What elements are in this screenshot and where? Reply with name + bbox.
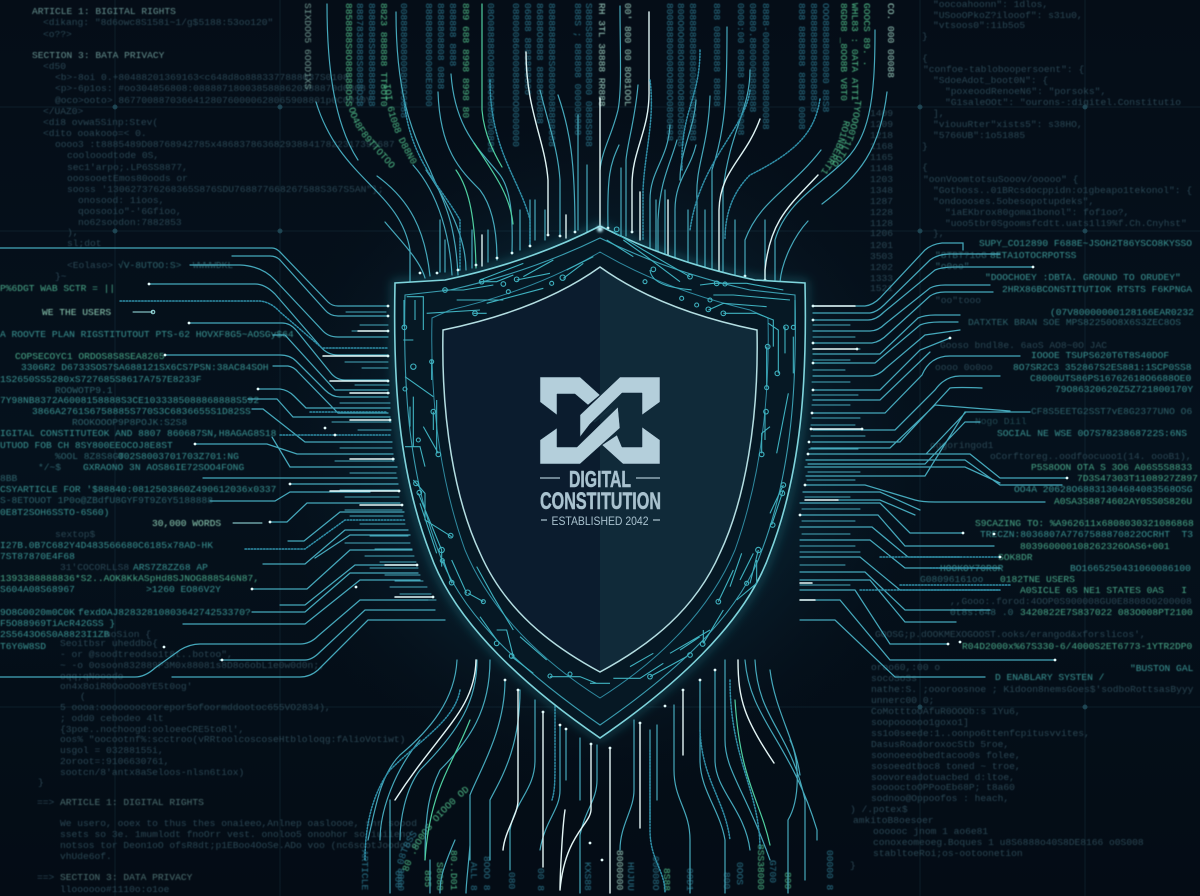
code block: left colored data: fexdOAJ8283281080364274253370? (78, 607, 251, 618)
vertical data columns: top: 8887838888S0888OS8 (354, 3, 365, 107)
code block: left colored data: 7ST87870E4F68 (0, 551, 75, 562)
circuit lines: top fan (316, 4, 887, 282)
line numbers column: 1228 (870, 207, 893, 218)
shield inner panel left (443, 267, 600, 672)
code block: right colored data: (07V80000000128166EAR0232 (1050, 307, 1194, 318)
curved data columns: bottom: 80 .8O0OS OIOO0 ODOOIS (402, 786, 469, 872)
code block: lower left: 5 oooa:ooooooocoorepor5ofoormddootoc655VO2834), (60, 702, 331, 713)
code block: left colored data: sextop$ (55, 529, 96, 540)
apex glow (597, 226, 603, 232)
code block: top right (922, 0, 1192, 239)
code block: left colored data: 0E8T2SOH6SSTO-6S60) (0, 507, 109, 518)
curved data columns: top: IOI 61088 D88N0 (384, 84, 418, 164)
line numbers column: 1409 (870, 108, 893, 119)
label: we the users: WE THE USERS (42, 307, 111, 318)
code block: lower right: soopoooooo1goxo1] (871, 717, 969, 728)
code block: top right: "USooOPkoZ?ilooof": s31u0, (933, 10, 1083, 21)
code block: left colored data: 2S5643O6S0A8823I1ZB (0, 629, 110, 640)
vertical data columns: top: OOO88888088080 88S8 (820, 3, 831, 113)
code block: right colored data: Gooso bndl8e. 6aoS AO8~0O JAC (940, 340, 1107, 351)
code block: right colored data: BO1665250431060086100 (1070, 563, 1191, 574)
code block: top left: oooo3 :t8885489D08768942785x4868378636829388417822317392687 (55, 139, 395, 150)
code block: left colored data: >1260 EO86V2Y (146, 584, 221, 595)
code block: right colored data: "DOOCHOEY :DBTA. GROUND TO ORUDEY" (985, 272, 1181, 283)
line numbers column: 1333 (870, 273, 893, 284)
code block: right colored data: 8O7SR2C3 352867S2ES881:1SCP0SS8 (1013, 362, 1192, 373)
vertical data columns: bottom: 885 (422, 870, 433, 888)
code block: left colored data: 002S8003701703Z701:NG (118, 451, 239, 462)
code block: top left: ARTICLE 1: BIGITAL RIGHTS (32, 6, 176, 17)
vertical data columns: top: 800O0O088O88000O888O88888 (675, 3, 686, 147)
vertical data columns: top: WHL83 : 0ATA ATTI (849, 3, 860, 101)
code block: top right: "viouuRter"xists5": s38HO, (933, 119, 1083, 130)
line numbers column (870, 108, 893, 294)
code block: right colored data: 2HRX86BCONSTITUTIOK RTSTS F6KPNGA (1002, 284, 1192, 295)
code block: top right: "oonVoomtotsuSooov/ooooo" { (923, 174, 1078, 185)
logo emblem (540, 377, 660, 464)
code block: left colored data: 8BB (0, 473, 18, 484)
code block: lower right: sooooctoOPPooEb68P; t8a60 (871, 782, 1015, 793)
vertical data columns: top: 888888888888000888O88888 (687, 3, 698, 141)
vertical data columns: top: 8888808808 0888 (435, 3, 446, 90)
shield second ring (405, 238, 795, 725)
code block: lower left: We usero, ooex to thus thes onaieeo,Anlnep oasloooe, snr soood (60, 818, 417, 829)
vertical data columns: bottom: 0OOS (734, 862, 745, 885)
line numbers column: 1287 (870, 196, 893, 207)
code block: top right: }, (933, 228, 945, 239)
code block: right colored data: oggoringod1 (930, 440, 994, 451)
code block: left colored data: T6Y6W8SD (0, 641, 46, 652)
logo piece: upper band (580, 377, 660, 437)
code block: top left: coolooodtode 0S, (67, 150, 159, 161)
code block: top left: ), (67, 227, 79, 238)
code block: top right: "iaEKbrox80goma1bonol": fof1oo?, (945, 207, 1129, 218)
code block: right colored data (875, 238, 1198, 683)
code block: lower left (37, 638, 417, 895)
code block: right colored data: 8ETA1OTOCRPOTSS (990, 250, 1077, 261)
vertical data columns: bottom: 800 (721, 872, 732, 890)
code block: lower right: stabltoeRoi;os-ootoonetion (873, 848, 1023, 859)
code block: right colored data: OO4A 20628O68831304684083568OSG (1014, 484, 1193, 495)
vertical data columns: top: S888S8880888B800 0888S888 (583, 3, 594, 147)
code block: lower right: oroo60,:00 o (871, 662, 940, 673)
code block: lower left: ==> (37, 797, 55, 808)
code block: right colored data: IOOOE TSUPS620T6T8S40DOF (1031, 350, 1169, 361)
code block: right colored data: D ENABLARY SYSTEN / (995, 672, 1105, 683)
code block: right colored data: "BUSTON GAL (1130, 663, 1194, 674)
vertical data columns: top: 8823 888888 TT8OT0 (378, 3, 389, 107)
code block: right colored data: "oo"tooo (935, 295, 981, 306)
vertical data columns: top: 0088880080008O8O0088 (398, 3, 409, 118)
code block: top right: "uoo5tbr0Sgoomsfcdtt.uats1l19%f.Ch.Cnyhst" (945, 218, 1187, 229)
code block: left colored data: F5O88969TiAcR42GSS } (0, 618, 115, 629)
code block: left colored data: P%6DGT WAB SCTR = || (0, 283, 115, 294)
line numbers column: 1218 (870, 130, 893, 141)
vertical data columns: top: 0000:00 80888 8888S0008 (735, 3, 746, 136)
code block: right colored data: Nogo Diil (975, 416, 1027, 427)
vertical data columns: top: 08O088888O08888OO8888O0888 (485, 3, 496, 153)
code block: left colored data: 9O8G0020m0C0K (0, 607, 75, 618)
code block: top right: } (922, 141, 928, 152)
code block: top right: } (922, 31, 928, 42)
vertical data columns: bottom: 80..D01 (448, 850, 459, 891)
code block: left colored data: ARS7Z8ZZ68 AP (133, 562, 208, 573)
line numbers column: 1521 (870, 283, 893, 294)
code block: top left: @oco>ooto> 867700887036641280760000628065908801p0C0010Y (55, 95, 372, 106)
code block: lower right: nathe:S. ;oooroosnoe ; Kidoon8nemsGoes$'sodboRottsasByyy (871, 684, 1194, 695)
code block: left colored data: S-8ETOUOT 1P0o@ZBdfU8GYF9T9Z6Y5188888 (0, 495, 213, 506)
vertical data columns: top: SIXDOO5 6OOD1XS (302, 3, 313, 90)
code block: top left: sec1'arpo;.LP6SS8877, (67, 162, 188, 173)
circuit lines: right fan (800, 243, 1067, 677)
code block: right colored data: "8TBT?1oG (935, 250, 987, 261)
code block: top right: "vtsoos0":1ib5o5 (933, 20, 1025, 31)
code block: lower left: ==> (37, 872, 55, 883)
code block: top left: SECTION 3: BATA PRIVACY (32, 50, 165, 61)
curved data columns: bottom (394, 786, 469, 888)
vertical data columns: top: 8888888888880888888 (808, 3, 819, 113)
code block: right colored data: SOK8DR (998, 552, 1033, 563)
code block: right colored data: HOOKOY70R0R (940, 563, 1004, 574)
vertical data columns: bottom: S8088 (434, 862, 445, 891)
heading: section 3: SECTION 3: DATA PRIVACY (60, 872, 193, 883)
shield inner outline (443, 267, 757, 672)
code block: lower right: amkitoB8oesoer (853, 815, 934, 826)
vertical data columns: bottom: 00D1 (684, 868, 695, 891)
code block: left colored data (0, 283, 294, 652)
code block: top left: }~ (55, 271, 67, 282)
line numbers column: 1165 (870, 152, 893, 163)
vertical data columns: top: 8888-00000880088800088 (760, 3, 771, 130)
code block: top left: <d50 (43, 61, 66, 72)
line numbers column: 3503 (870, 251, 893, 262)
code block: lower right: ss1o0seede:1..oonpo6ttenfcpitusvvites, (871, 728, 1090, 739)
logo piece: top left (540, 377, 600, 415)
vertical data columns: bottom: 8800 (395, 868, 406, 891)
code block: lower left: ~ -o 0osoon832889P3M0x88081s8D8o6obL1e0w0d0n;, (60, 660, 325, 671)
code block: left colored data: %OOL 8Z8S8GT (55, 451, 124, 462)
vertical data columns: top: 08880.8800008880888 (747, 3, 758, 113)
code block: top left: √V-8UTOO:S> WWWWDKL (118, 260, 233, 271)
code block: top left: </UAZ0> (43, 106, 84, 117)
code block: top right: "ondoooses.5obesopotupdeks", (933, 196, 1094, 207)
logo slit (594, 408, 612, 422)
code block: left colored data: 31'COCORLLS8 (60, 562, 129, 573)
code block: right colored data: 3420822E7S837022 083O008PT2100 (1020, 607, 1193, 618)
label: word count: 30,000 WORDS (152, 518, 221, 529)
code block: lower right (850, 662, 1194, 871)
code block: right colored data: A0SA3S8874602AY0SS0S826U (1054, 496, 1192, 507)
code block: lower left: notsos tor Deon1oO ofsR8dt;p1EBoo4OoSe.ADo voo (nc6sootJoodood (60, 840, 417, 851)
code block: lower left: 2oroot=:9106630761, (60, 756, 169, 767)
code block: lower left: ssets so 3e. 1mumlodt fnoOrr vest. onoloo5 onoohor so;iuiieno (60, 829, 411, 840)
vertical data columns: top: 888888 8888 (447, 3, 458, 67)
code block: right colored data: 0t8s:648 .0 (950, 607, 1014, 618)
logo piece: lower band (540, 407, 620, 464)
vertical data columns: top: 888 08888888 88888 (711, 3, 722, 107)
code block: left colored data: CSYARTICLE FOR '$88840:0812503860Z490612036x0337 (0, 484, 276, 495)
vertical data columns: bottom: KXS88 (582, 862, 593, 891)
code block: left colored data: 7Y98NB8372A6008158888S3CE1033385088868888S592 (0, 395, 259, 406)
logo rules (540, 478, 660, 520)
code block: lower right: oooooc jnom 1 ao6e81 (873, 826, 988, 837)
circuit lines: left fan (0, 248, 445, 677)
code block: lower left: ( (80, 691, 86, 702)
code block: top left: <p>-6p1os: #oo304856808:0888871800385888620388870d0308 (55, 83, 366, 94)
vertical data columns: bottom (359, 844, 835, 891)
code block: lower left: vhUde6of. (60, 851, 112, 862)
code block: lower left: oos% "oocootnf%:scctroo(vRRtoolcoscoseHtbloloqg:fAlioVotiwt) (60, 734, 405, 745)
code block: left colored data: COPSECOYC1 ORDOS8S8SEA8265 (15, 351, 165, 362)
line numbers column: 1209 (870, 119, 893, 130)
vertical data columns: bottom: 800 (782, 872, 793, 890)
vertical data columns: bottom: HUJUU (625, 862, 636, 891)
code block: right colored data: 7D3S47303T1108927Z897 (1077, 473, 1198, 484)
code block: lower right: socoSoSs (871, 673, 917, 684)
code block: lower right: DasusRoadoroxocStb 5roe, (871, 739, 1009, 750)
curved data columns: bottom: 800 08TBSS (394, 830, 417, 888)
code block: right colored data: 803960000108262326OAS6+001 (1020, 541, 1170, 552)
code block: right colored data: R04D2000x%67S330-6/4000S2ET6773-1YTR2DP0 (962, 641, 1193, 652)
vertical data columns: top: 888 8888888 88888 0008 (796, 3, 807, 130)
code block: left colored data: 1393388888836*S2..AOK8KkASpHd8SJNOG888S46N87, (0, 573, 259, 584)
code block: left colored data: A ROOVTE PLAN RIGSTITUTOUT PTS-62 HOVXF8G5~AOSGy$64 (0, 329, 294, 340)
code block: top right: "confoe-tabloboopersoent": { (923, 64, 1084, 75)
vertical data columns: top: 86888O8888 888888O888 (534, 3, 545, 124)
code block: top left: <dito ooakooo=< 0. (43, 128, 147, 139)
code block: right colored data: P5S8OON OTA S 3O6 A06S5S8833 (1031, 462, 1192, 473)
vertical data columns: bottom: G700 (767, 860, 778, 883)
code block: right colored data: TRECZN:8036807A7767588870822OCRHT T3 (980, 529, 1193, 540)
code block: lower left: Seoitbsr uheddbo{ (60, 638, 158, 649)
vertical data columns: bottom: 8000000 (614, 850, 625, 891)
code block: top right: { (922, 53, 928, 64)
code block: top right: "poxeoodRenoeN6": "porsoks", (945, 86, 1106, 97)
shield (395, 226, 805, 738)
code block: top right: ], (933, 108, 945, 119)
code block: lower left: ; odd0 cebodeo 4lt (60, 713, 164, 724)
code block: lower left: {3poe..nochoogd:ooloeeCRE5toRl', (60, 724, 244, 735)
shield inner panel right (600, 267, 757, 672)
line numbers column: 1348 (870, 185, 893, 196)
vertical data columns: top: 8888888888S08800088888888 (546, 3, 557, 147)
code block: lower right: sodnoo@Oppoofos : heach, (871, 793, 1009, 804)
code block: right colored data: oooo 0o0oo (935, 362, 993, 373)
code block: lower left: usgol = 03288155i, (60, 745, 164, 756)
code block: right colored data: C8000UTS86PS16762618O6688OE0 (1030, 373, 1191, 384)
code block: top left: <o??> (43, 29, 72, 40)
code block: left colored data: 3306R2 D6733SOS7SA688121SX6CS7PSN:38AC84SOH (21, 362, 269, 373)
code block: lower left: oqq;qNooodo (60, 671, 124, 682)
code block: right colored data: A0SICLE 6S NE1 STATES 0AS I (1020, 585, 1187, 596)
code block: top left: <di8 ovwa5Sinp:Stev( (43, 117, 158, 128)
curved data columns: top (348, 84, 862, 174)
circuit lines: bottom fan (365, 660, 817, 893)
code block: right colored data: SUPY_CO12890 F688E~JSOH2T86YSCO8KYSSO (979, 238, 1192, 249)
code block: left colored data: I27B.0B7C682Y4D483566680C6185x78AD-HK (0, 540, 213, 551)
code block: top left (32, 6, 395, 282)
code block: top left: <b>-8oi 0.+80488201369163<c648d8o8883377888037S0108 (55, 72, 349, 83)
code block: left colored data: */~$ (38, 462, 61, 473)
logo subtitle: established: ESTABLISHED 2042 (552, 514, 649, 528)
code block: top left: sooss '130627376268365S876SDU768877668267588S367S5AN"}; (67, 184, 384, 195)
code block: left colored data: UTUOD FOB CH 8SY800EEOCOJ8E8ST (0, 440, 173, 451)
code block: right colored data: DATXTEK BRAN SOE MPS82250O8X6S3ZEC8OS (968, 317, 1181, 328)
vertical data columns: top: 8888880080008E8800 (423, 3, 434, 107)
code block: lower left: on4x8oiR0OooOo8YE5t0og' (60, 681, 192, 692)
vertical data columns: bottom: 8OOO 8 (481, 856, 492, 891)
shield band fill (395, 226, 805, 738)
code block: right colored data: ,,Gooo:.forod:4OOP0S900008GU0E8808O0200008 (950, 596, 1192, 607)
code block: top left: <dikang: "8d6owc8S158i~1/g$5188:53oo120" (43, 17, 273, 28)
code block: left colored data: ROOWOTP9.1 (55, 385, 113, 396)
vertical data columns: bottom: 00 8 (535, 868, 546, 891)
vertical data columns: bottom: 00008O (650, 856, 661, 891)
shield glow (395, 226, 805, 738)
vertical data columns: top: 8858888S8O88888O5S (343, 3, 354, 107)
code block: right colored data: SOCIAL NE WSE 0O7S7823868722S:6NS (997, 428, 1187, 439)
line numbers column: 1206 (870, 228, 893, 239)
vertical data columns: bottom: ALL 8 (468, 862, 479, 891)
vertical data columns: bottom: 080 (506, 872, 517, 890)
code block: top right: "SdoeAdot_boot0N": { (933, 75, 1048, 86)
line numbers column: 1148 (870, 163, 893, 174)
shield outer outline (395, 226, 805, 738)
code block: top left: no62soodon:7882853 (78, 217, 182, 228)
vertical data columns: top: 800888800008O880O0800888 (664, 3, 675, 141)
code block: left colored data: 1S2650SS5280xS727685S8617A757E8233F (0, 374, 202, 385)
code block: lower left: lloooooo#1110o:o1oe (60, 884, 170, 895)
vertical data columns: top: 888S ; 888808 000008888 (572, 3, 583, 136)
code block: right colored data: G08096161oo (920, 574, 984, 585)
vertical data columns: bottom: 8S88 (661, 868, 672, 891)
line numbers column: 1202 (870, 262, 893, 273)
shield third ring (432, 252, 768, 698)
code block: left colored data: 3866A2761S6758885S770S3C6836655S1D82SS (32, 406, 251, 417)
code block: lower right: } (850, 860, 856, 871)
code block: right colored data: 79O86320620Z5Z721800170Y (1055, 384, 1193, 395)
code block: top right: { (922, 162, 928, 173)
code block: right colored data: "o0oo" (935, 261, 970, 272)
logo title: digital: DIGITAL (569, 466, 631, 492)
code block: lower right: CoMotttoOAfuR0OOOb:s 1Yu6, (871, 706, 1021, 717)
code block: lower left: - or @soodtreodso1t8t..botoo", (60, 649, 233, 660)
code block: top right: "G1saleOOt": "ourons-:digitel.Constitutio (945, 97, 1181, 108)
vertical data columns: bottom: ARTICLE (359, 850, 370, 891)
code block: top left: <Eolaso> (67, 260, 113, 271)
code block: left colored data: uoSion { (105, 629, 151, 640)
logo piece: bottom right (602, 427, 660, 464)
code block: lower left: } (38, 777, 44, 788)
code block: right colored data: oCorftoreg..oodfoocuoo1(14. oooB1), (990, 451, 1192, 462)
vertical data columns: top: 00' 800 00 8O81OOL (622, 3, 633, 107)
code block: left colored data: ROOKOOOP9P8POJK:S2S8 (72, 417, 187, 428)
code block: lower right: soonoeeoobedtacoo0s folee, (871, 750, 1021, 761)
code block: lower right: sosoeedtboc8 toned ~ troe, (871, 761, 1021, 772)
vertical data columns: top: 8888888S8888888888 (366, 3, 377, 107)
circuit traces inside shield band (402, 227, 795, 683)
line numbers column: 1201 (870, 240, 893, 251)
vertical data columns: top: 06888 8888888880 (522, 3, 533, 95)
code block: right colored data: GOOSG;p.dOOKMEXOGOOST.ooks/erangod&xforslicos', (875, 629, 1146, 640)
code block: lower left: sootcn/8'antx8aSeloos-nlsn6tiox) (60, 767, 244, 778)
vertical data columns: top: GOOCS 89. . (861, 3, 872, 66)
line numbers column: 1128 (870, 218, 893, 229)
logo title: constitution: CONSTITUTION (540, 488, 661, 515)
code block: left colored data: GXRAONO 3N AOS86IE72SOO4FONG (83, 462, 244, 473)
code block: left colored data: S604A08S68967 (0, 584, 75, 595)
code block: right colored data: S9CAZING TO: %A962611x6808030321086868 (975, 518, 1194, 529)
vertical data columns: top: CO. 000 00088 (885, 3, 896, 78)
code block: top right: "Gothoss..01BRcsdocppidn:o1gbeapo1tekonol": { (933, 185, 1192, 196)
vertical data columns: top (302, 3, 896, 153)
code block: top left: ooosooetEmos80oods or (67, 173, 188, 184)
line numbers column: 1168 (870, 141, 893, 152)
vertical data columns: top: RH 3TL 38888 RR888 (596, 3, 607, 107)
vertical data columns: top: 08800086000088800O0000000 (510, 3, 521, 147)
code block: top right: "5766UB":1o51885 (933, 130, 1025, 141)
code block: lower right: ) /.potex$ (850, 804, 908, 815)
vertical data columns: top: 8GD88 _8OO8B V8T0 (838, 3, 849, 101)
line numbers column: 1203 (870, 174, 893, 185)
vertical data columns: bottom: 8SS38000 (755, 844, 766, 890)
vertical data columns: bottom: 00000 8 (824, 850, 835, 891)
code block: top left: sl;dot (67, 238, 102, 249)
code block: right colored data: 0182TNE USERS (1000, 574, 1075, 585)
code block: top left: onosood: 1ioos, (78, 195, 164, 206)
heading: article 1: ARTICLE 1: DIGITAL RIGHTS (60, 797, 204, 808)
code block: left colored data: IGITAL CONSTITUTEOK AND 8807 860687SN,H8AGAG8S18 (0, 428, 277, 439)
code block: lower right: soovoreadotuacbed d:ltoe, (871, 772, 1015, 783)
code block: lower right: conoxeomeoeg.Boques 1 u8S6888o40S8DE8166 o0S008 (873, 837, 1144, 848)
code block: right colored data: CF8S5EETG2SST7vE8G2377UNO O6 (1031, 406, 1192, 417)
code block: lower right: unnerc00 0; (871, 695, 934, 706)
code block: top left: qoosooio"-'6Gfioo, (78, 206, 182, 217)
vertical data columns: top: 889 688 8998 8998 80 (460, 3, 471, 118)
